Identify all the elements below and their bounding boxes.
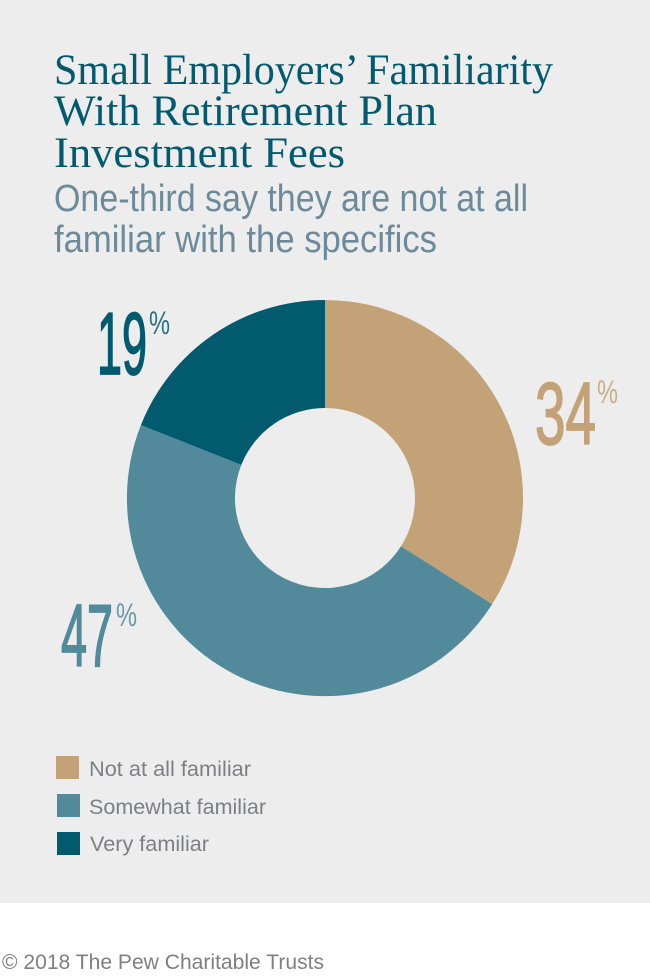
title [54, 47, 553, 177]
title: Investment Fees [54, 130, 345, 177]
copyright footer: © 2018 The Pew Charitable Trusts [2, 951, 324, 974]
segment: not at all familiar 34% [325, 300, 523, 604]
segment: somewhat familiar 47% [127, 425, 492, 696]
subtitle: One-third say they are not at all [54, 178, 528, 220]
value label: 34%: 34 [535, 364, 596, 463]
subtitle [54, 178, 528, 261]
legend item: somewhat familiar: Somewhat familiar [89, 796, 266, 819]
value label: 47%: % [116, 597, 137, 633]
value label: 19%: % [149, 305, 170, 341]
value label: 47%: 47 [61, 586, 113, 685]
title: Small Employers’ Familiarity [54, 47, 553, 94]
value label: 19%: 19 [97, 294, 147, 393]
segment: very familiar 19% [141, 300, 325, 465]
value label: 34%: % [597, 374, 618, 410]
donut chart [127, 300, 523, 696]
legend item: very familiar: Very familiar [90, 833, 209, 856]
title: With Retirement Plan [54, 88, 437, 135]
legend item: not at all familiar: Not at all familiar [89, 758, 251, 781]
legend [56, 756, 266, 856]
subtitle: familiar with the specifics [54, 219, 437, 261]
